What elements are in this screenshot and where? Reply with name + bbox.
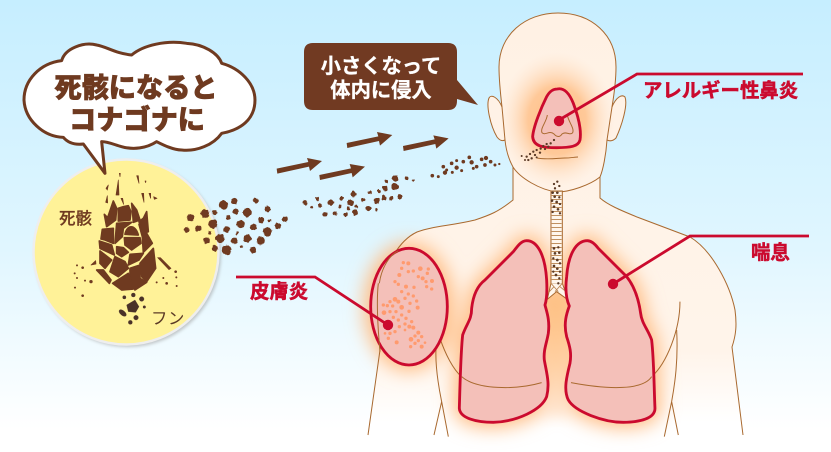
chest lines over lungs bbox=[462, 377, 652, 388]
callout text: 小さくなって bbox=[321, 55, 441, 78]
speech cloud: コナゴナに bbox=[69, 104, 205, 135]
body lines bbox=[434, 302, 680, 437]
nose inflammation area bbox=[533, 89, 580, 148]
human body bbox=[368, 13, 743, 437]
faeces bbox=[118, 293, 146, 324]
speech cloud bbox=[24, 42, 255, 173]
body silhouette bbox=[368, 13, 743, 435]
brown callout: 体内に侵入 bbox=[330, 79, 432, 102]
centre chest glow bbox=[543, 290, 569, 415]
dust cloud 3 bbox=[431, 156, 500, 178]
label: asthma: 喘息 bbox=[751, 241, 790, 264]
dust cloud 2 bbox=[303, 176, 414, 217]
mite carcass bbox=[74, 173, 178, 324]
callout leader: allergic rhinitis bbox=[554, 74, 803, 126]
glows bbox=[370, 241, 655, 422]
callout leader: asthma bbox=[608, 236, 809, 289]
callout leader: dermatitis bbox=[236, 277, 393, 330]
cloud heading: 死骸になると bbox=[54, 72, 218, 103]
label: dermatitis: 皮膚炎 bbox=[250, 281, 308, 303]
right lung bbox=[565, 241, 655, 422]
arrow 2 bbox=[319, 164, 365, 180]
dust cloud 1 bbox=[184, 198, 287, 254]
mouth line bbox=[537, 157, 578, 159]
lungs bbox=[459, 241, 655, 422]
left lung bbox=[459, 241, 549, 422]
arrow 4 bbox=[403, 135, 449, 151]
arrow 1 bbox=[277, 158, 322, 174]
yellow circle: mite carcass bbox=[34, 160, 221, 347]
label: carcass: 死骸 bbox=[59, 209, 92, 228]
inhaled dust in nose, mouth and trachea bbox=[521, 139, 561, 214]
body outlines bbox=[368, 13, 743, 435]
arrow 3 bbox=[347, 132, 392, 148]
nose glow bbox=[499, 52, 615, 188]
trachea bbox=[547, 191, 568, 300]
brown callout bbox=[304, 43, 478, 110]
label: faeces: フン bbox=[151, 310, 184, 328]
skin inflammation area bbox=[371, 248, 447, 365]
label: allergic rhinitis: アレルギー性鼻炎 bbox=[643, 80, 798, 102]
